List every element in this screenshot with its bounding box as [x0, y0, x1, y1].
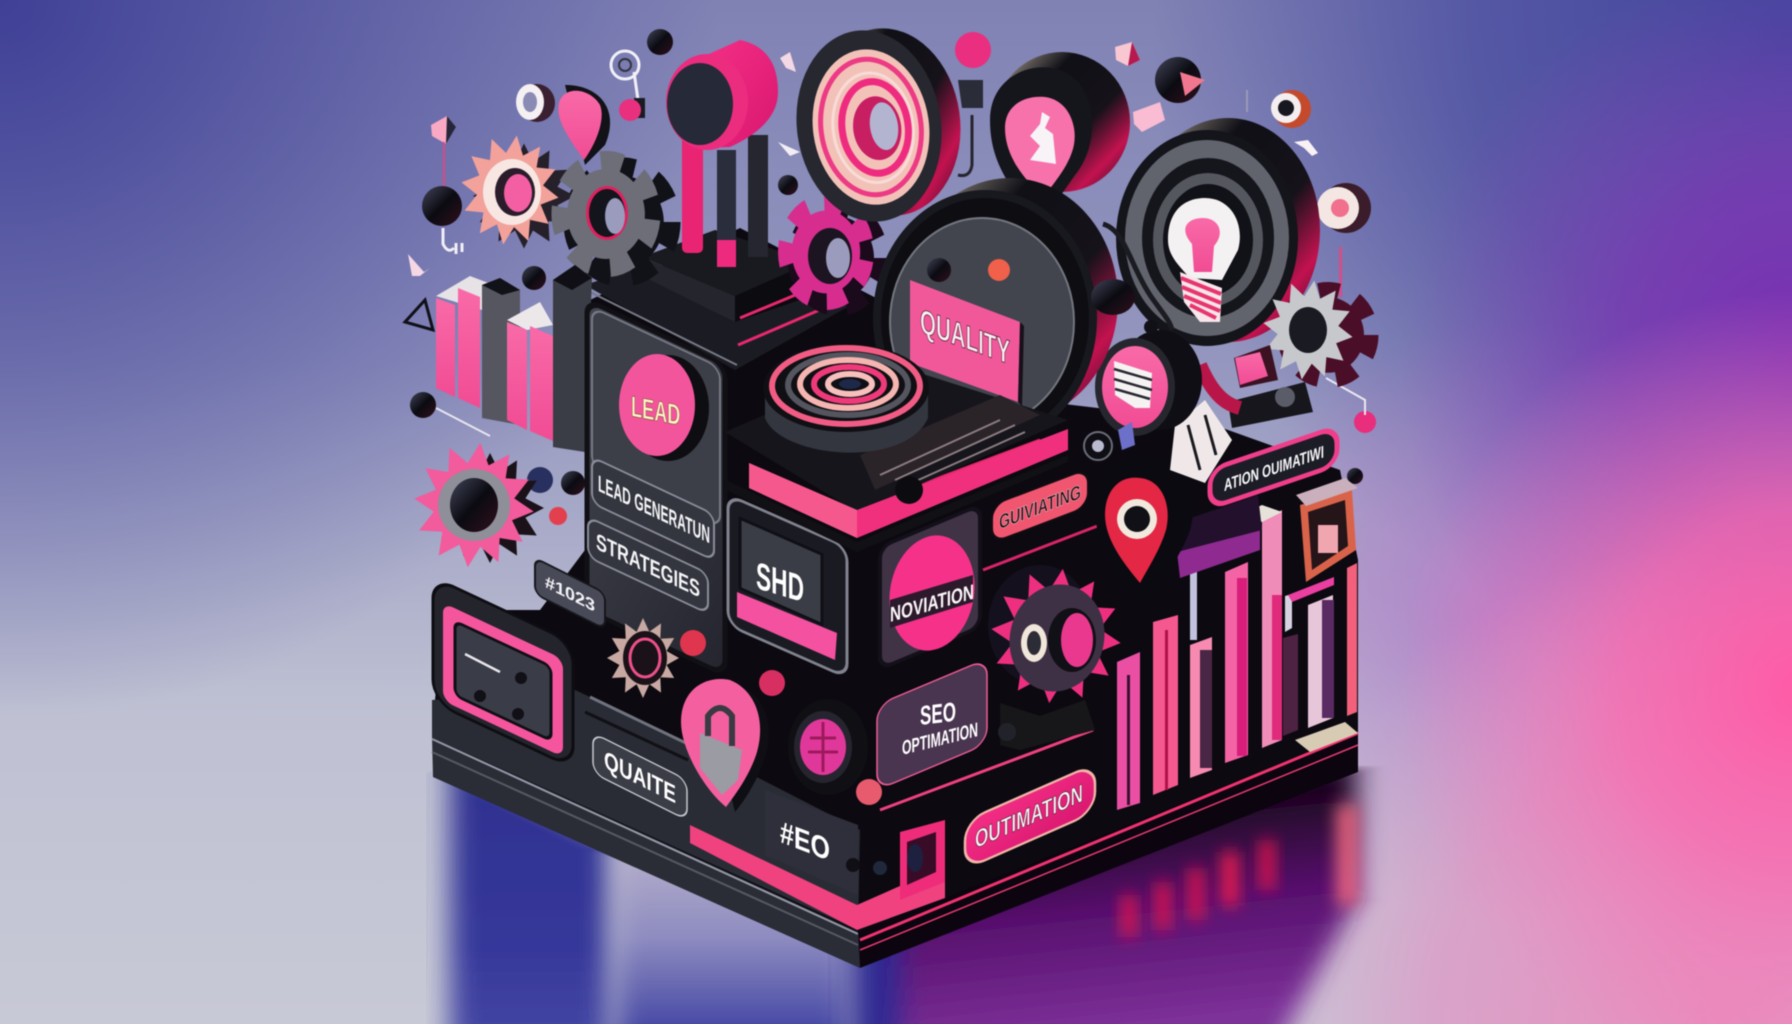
tag: optimization pill [965, 764, 1095, 869]
icon: pink ball lever [955, 32, 991, 176]
icon: feather and arm [1170, 365, 1313, 483]
panel: base platform [432, 722, 1358, 968]
chart: right bars [1117, 505, 1357, 810]
icon: small ring left [516, 84, 555, 122]
icon: lightning pin [990, 52, 1130, 218]
panel: left screen tile [433, 577, 573, 768]
icon: grey cog [556, 156, 671, 276]
QUALITY text: QUALITY [920, 302, 1010, 372]
panel: lower tier with #EO [690, 790, 945, 930]
tag: guiviating pill [992, 469, 1088, 543]
icon: flat spiral disc [763, 344, 929, 453]
icon: magenta cog [780, 196, 880, 308]
floating particles left [405, 29, 800, 525]
ation text: ATION OUIMATIWI [1224, 442, 1324, 495]
LEAD label: LEAD [631, 391, 680, 432]
panel: lower left charcoal face [432, 690, 860, 930]
tag: SHD tile [728, 495, 847, 677]
icon: lock pin [681, 679, 769, 812]
code text: #1023 [545, 572, 595, 616]
strategies text: STRATEGIES [596, 529, 700, 603]
#EO text: #EO [780, 814, 830, 868]
small bracket [998, 700, 1095, 750]
quaite text: QUAITE [604, 745, 676, 809]
pink trim right lower [880, 440, 1100, 810]
tag: ation pill [1210, 427, 1337, 508]
icon: striped badge [1095, 320, 1202, 436]
icon: arm purple [1170, 495, 1262, 578]
icon: small cog centre [607, 618, 785, 698]
icon: gear rings right [1271, 90, 1371, 233]
optimization text: OPTIMATION [902, 719, 978, 760]
guiviating text: GUIVIATING [999, 481, 1081, 534]
tag: SEO optimization [877, 659, 987, 790]
icon: knob on posts [666, 40, 778, 267]
optimization pill text: OUTIMATION [975, 778, 1083, 854]
icon: LEAD badge [619, 354, 709, 461]
icon: lightbulb disc [1103, 118, 1320, 346]
panel: mid block with flat spiral [725, 362, 1068, 552]
icon: pink spiked cog lower left [408, 436, 544, 574]
panel: lead column [587, 300, 725, 675]
floor reflection [450, 765, 1358, 1024]
small dial [1084, 422, 1135, 460]
icon: grey gear right [1234, 274, 1370, 388]
panel: innovation tile [880, 505, 983, 669]
icon: tile square right [1296, 478, 1358, 582]
icon: QUALITY dome [873, 178, 1135, 446]
icon: location pin [1095, 454, 1193, 605]
panel: main body silhouette [432, 228, 1358, 935]
icon: floating cubes and ball [1115, 42, 1376, 484]
tag: QUAITE [593, 733, 687, 820]
panel: stand top [585, 230, 860, 370]
icon: spiral disc [784, 19, 972, 231]
chart: left bars [436, 265, 592, 452]
tag: lead generation [592, 457, 714, 560]
innovation text: NOVIATION [890, 580, 974, 627]
icon: pink drop [558, 85, 610, 165]
icon: pink cog [455, 128, 575, 252]
lead generation text: LEAD GENERATUN [598, 471, 710, 549]
SHD text: SHD [756, 555, 804, 611]
icon: spiked pink gear [985, 562, 1127, 710]
tag: number code [535, 558, 605, 629]
tag: strategies [588, 517, 708, 613]
icon: pink globe button [788, 699, 882, 805]
icon: swirl key [611, 51, 645, 121]
SEO text: SEO [920, 696, 956, 731]
